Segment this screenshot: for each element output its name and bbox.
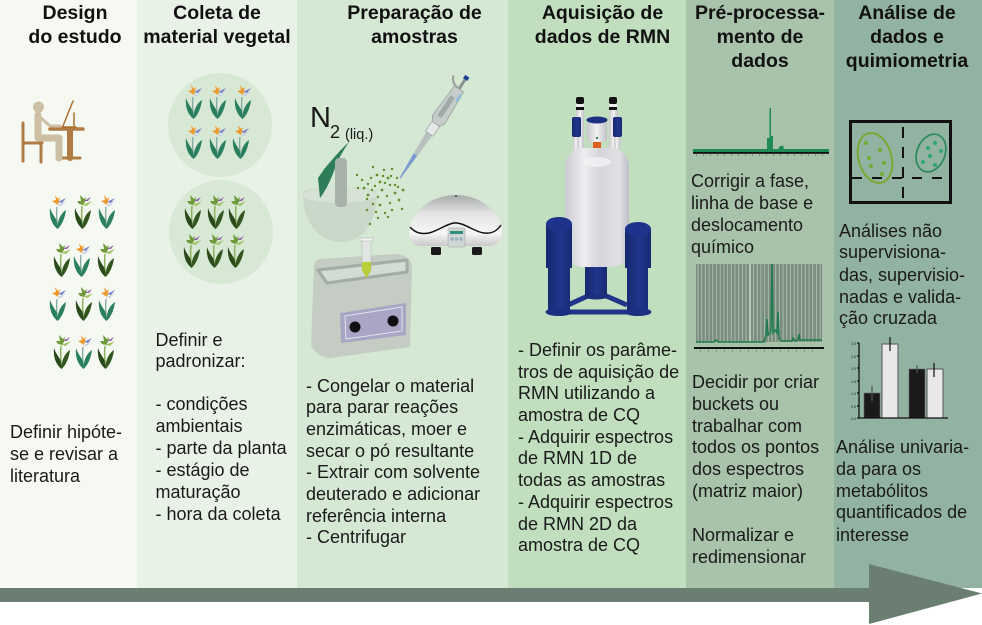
text: análise univariada: metabólitos <box>836 481 928 501</box>
heading: Coleta de material vegetal: Coleta de <box>173 2 261 24</box>
chart: spectrum with buckets <box>694 264 824 351</box>
text: corrigir a fase: deslocamento <box>691 215 803 235</box>
text: congelar e extrair: - Centrifugar <box>306 527 406 547</box>
text: definir e padronizar: - hora da coleta <box>156 504 282 524</box>
chart: bar chart <box>851 337 948 421</box>
text: corrigir a fase: Corrigir a fase, <box>691 171 809 191</box>
icon: circle of green plants <box>169 180 273 284</box>
text: congelar e extrair: - Extrair com solvente <box>306 462 480 482</box>
icon: ultrasonic bath with tube <box>311 238 412 358</box>
icon: centrifuge <box>409 195 502 255</box>
text: definir parâmetros: de RMN 1D de <box>518 448 637 468</box>
text: congelar e extrair: secar o pó resultante <box>306 441 474 461</box>
heading: Pré-processamento de dados: Pré-processa- <box>695 2 825 24</box>
icon: mortar and pestle with leaf <box>303 142 377 242</box>
text: análise univariada: interesse <box>836 525 909 545</box>
heading: Análise de dados e quimiometria: quimiometria <box>846 50 968 72</box>
text: definir parâmetros: tros de aquisição de <box>518 362 679 382</box>
text: definir hipótese: se e revisar a <box>10 444 119 464</box>
text: congelar e extrair: deuterado e adicionar <box>306 484 480 504</box>
text: análise univariada: Análise univaria- <box>836 437 969 457</box>
chart: bar chart: 1.5 <box>851 380 856 384</box>
icon: plants field <box>50 195 115 369</box>
heading: Aquisição de dados de RMN: dados de RMN <box>535 26 670 48</box>
text: definir parâmetros: RMN utilizando a <box>518 383 656 403</box>
text: decidir e normalizar: Normalizar e <box>692 525 794 545</box>
chart: score plot <box>850 122 951 202</box>
text: análise univariada: da para os <box>836 459 921 479</box>
arrow: timeline <box>0 564 982 624</box>
text: congelar e extrair: - Congelar o material <box>306 376 474 396</box>
text: congelar e extrair: enzimáticas, moer e <box>306 419 467 439</box>
label: N2 liquid: (liq.) <box>345 127 373 143</box>
chart: bar chart: 0.5 <box>851 405 856 409</box>
chart: corrected spectrum <box>693 108 829 155</box>
text: corrigir a fase: químico <box>691 237 754 257</box>
text: definir parâmetros: - Adquirir espectros <box>518 427 673 447</box>
text: definir e padronizar: ambientais <box>156 416 243 436</box>
text: decidir e normalizar: (matriz maior) <box>692 481 803 501</box>
chart: bar chart: 0.0 <box>851 417 856 421</box>
text: corrigir a fase: linha de base e <box>691 193 813 213</box>
text: definir parâmetros: amostra de CQ <box>518 405 640 425</box>
label: N2 liquid: 2 <box>330 122 340 142</box>
text: análises multivariadas: Análises não <box>839 221 942 241</box>
text: decidir e normalizar: buckets ou <box>692 394 779 414</box>
text: definir parâmetros: - Definir os parâme- <box>518 340 677 360</box>
icon: micropipette <box>390 70 474 182</box>
heading: Aquisição de dados de RMN: Aquisição de <box>542 2 663 24</box>
text: definir e padronizar: maturação <box>156 482 241 502</box>
text: definir parâmetros: de RMN 2D da <box>518 514 638 534</box>
text: decidir e normalizar: trabalhar com <box>692 416 802 436</box>
chart: bar chart: 1.0 <box>851 392 856 396</box>
text: definir parâmetros: - Adquirir espectros <box>518 492 673 512</box>
text: definir parâmetros: amostra de CQ <box>518 535 640 555</box>
icon: NMR spectrometer magnet <box>546 97 652 316</box>
heading: Coleta de material vegetal: material vegetal <box>143 26 291 48</box>
text: definir e padronizar: Definir e <box>156 330 223 350</box>
chart: bar chart: 2.5 <box>851 355 856 359</box>
heading: Preparação de amostras: amostras <box>371 26 458 48</box>
icon: circle of flowering plants <box>168 73 272 177</box>
text: definir parâmetros: todas as amostras <box>518 470 665 490</box>
text: análises multivariadas: nadas e valida- <box>839 287 961 307</box>
text: congelar e extrair: referência interna <box>306 506 447 526</box>
text: definir hipótese: literatura <box>10 466 81 486</box>
text: decidir e normalizar: todos os pontos <box>692 437 819 457</box>
text: definir e padronizar: - estágio de <box>156 460 250 480</box>
chart: bar chart: 2.0 <box>851 367 856 371</box>
heading: Design do estudo: do estudo <box>28 26 122 48</box>
text: análises multivariadas: supervisiona- <box>839 242 946 262</box>
text: definir e padronizar: - parte da planta <box>156 438 288 458</box>
text: decidir e normalizar: Decidir por criar <box>692 372 819 392</box>
text: decidir e normalizar: redimensionar <box>692 547 806 567</box>
heading: Design do estudo: Design <box>42 2 108 24</box>
heading: Pré-processamento de dados: dados <box>731 50 789 72</box>
text: análises multivariadas: das, supervisio- <box>839 265 965 285</box>
heading: Análise de dados e quimiometria: dados e <box>870 26 944 48</box>
label: N2 liquid: N <box>310 102 331 134</box>
heading: Análise de dados e quimiometria: Análise de <box>858 2 956 24</box>
text: definir e padronizar: padronizar: <box>156 351 246 371</box>
heading: Preparação de amostras: Preparação de <box>347 2 482 24</box>
text: definir e padronizar: - condições <box>156 394 248 414</box>
text: análise univariada: quantificados de <box>836 502 967 522</box>
text: decidir e normalizar: dos espectros <box>692 459 804 479</box>
text: análises multivariadas: ção cruzada <box>839 308 938 328</box>
text: congelar e extrair: para parar reações <box>306 397 458 417</box>
text: definir hipótese: Definir hipóte- <box>10 422 122 442</box>
heading: Pré-processamento de dados: mento de <box>717 26 803 48</box>
chart: bar chart: 3.5 <box>851 342 856 346</box>
icon: powder particles <box>356 166 404 225</box>
icon: person at desk <box>23 101 83 162</box>
